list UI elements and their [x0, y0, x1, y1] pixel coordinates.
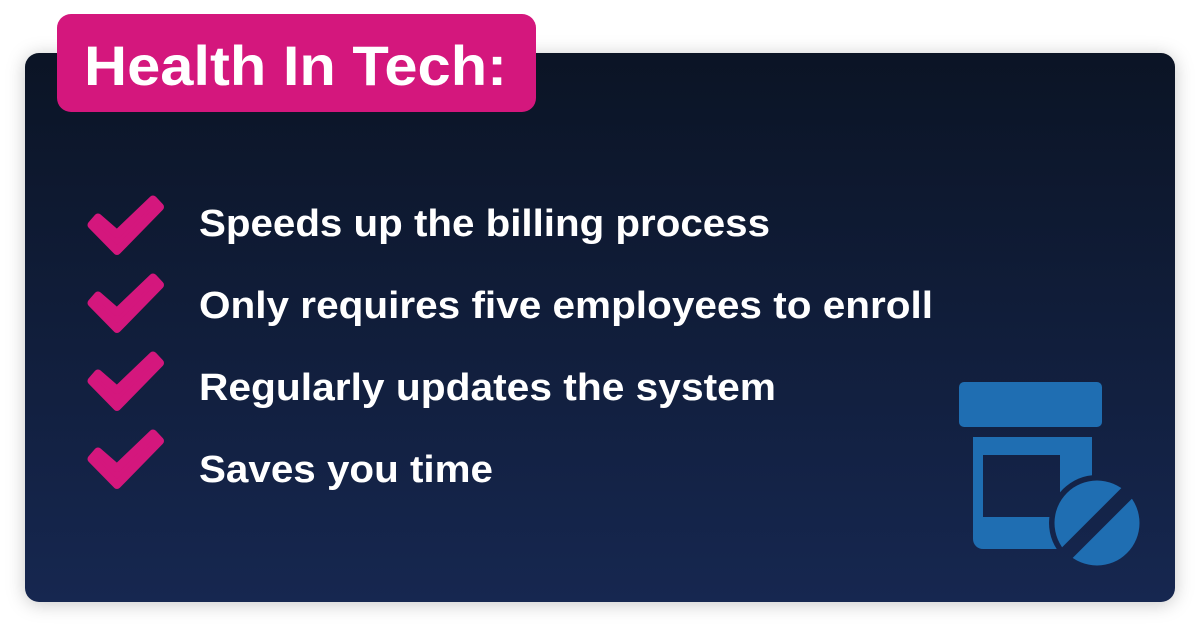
item 2: [92, 278, 933, 329]
text: item 3: Regularly updates the system: [199, 367, 776, 409]
checklist: [92, 200, 933, 491]
icon: pill bottle: [959, 382, 1140, 566]
title tag: [57, 14, 536, 112]
bottle body: [973, 437, 1092, 549]
bottle lid: [959, 382, 1102, 427]
title: Health In Tech:: [84, 34, 507, 97]
text: item 1: Speeds up the billing process: [199, 203, 770, 245]
icon: check mark: [92, 434, 160, 485]
icon: check mark: [92, 200, 160, 251]
item 1: [92, 200, 770, 251]
pill: [1054, 480, 1140, 566]
text: item 4: Saves you time: [199, 449, 493, 491]
icon: check mark: [92, 356, 160, 407]
icon: check mark: [92, 278, 160, 329]
text: item 2: Only requires five employees to enroll: [199, 285, 933, 327]
item 3: [92, 356, 776, 409]
item 4: [92, 434, 493, 491]
